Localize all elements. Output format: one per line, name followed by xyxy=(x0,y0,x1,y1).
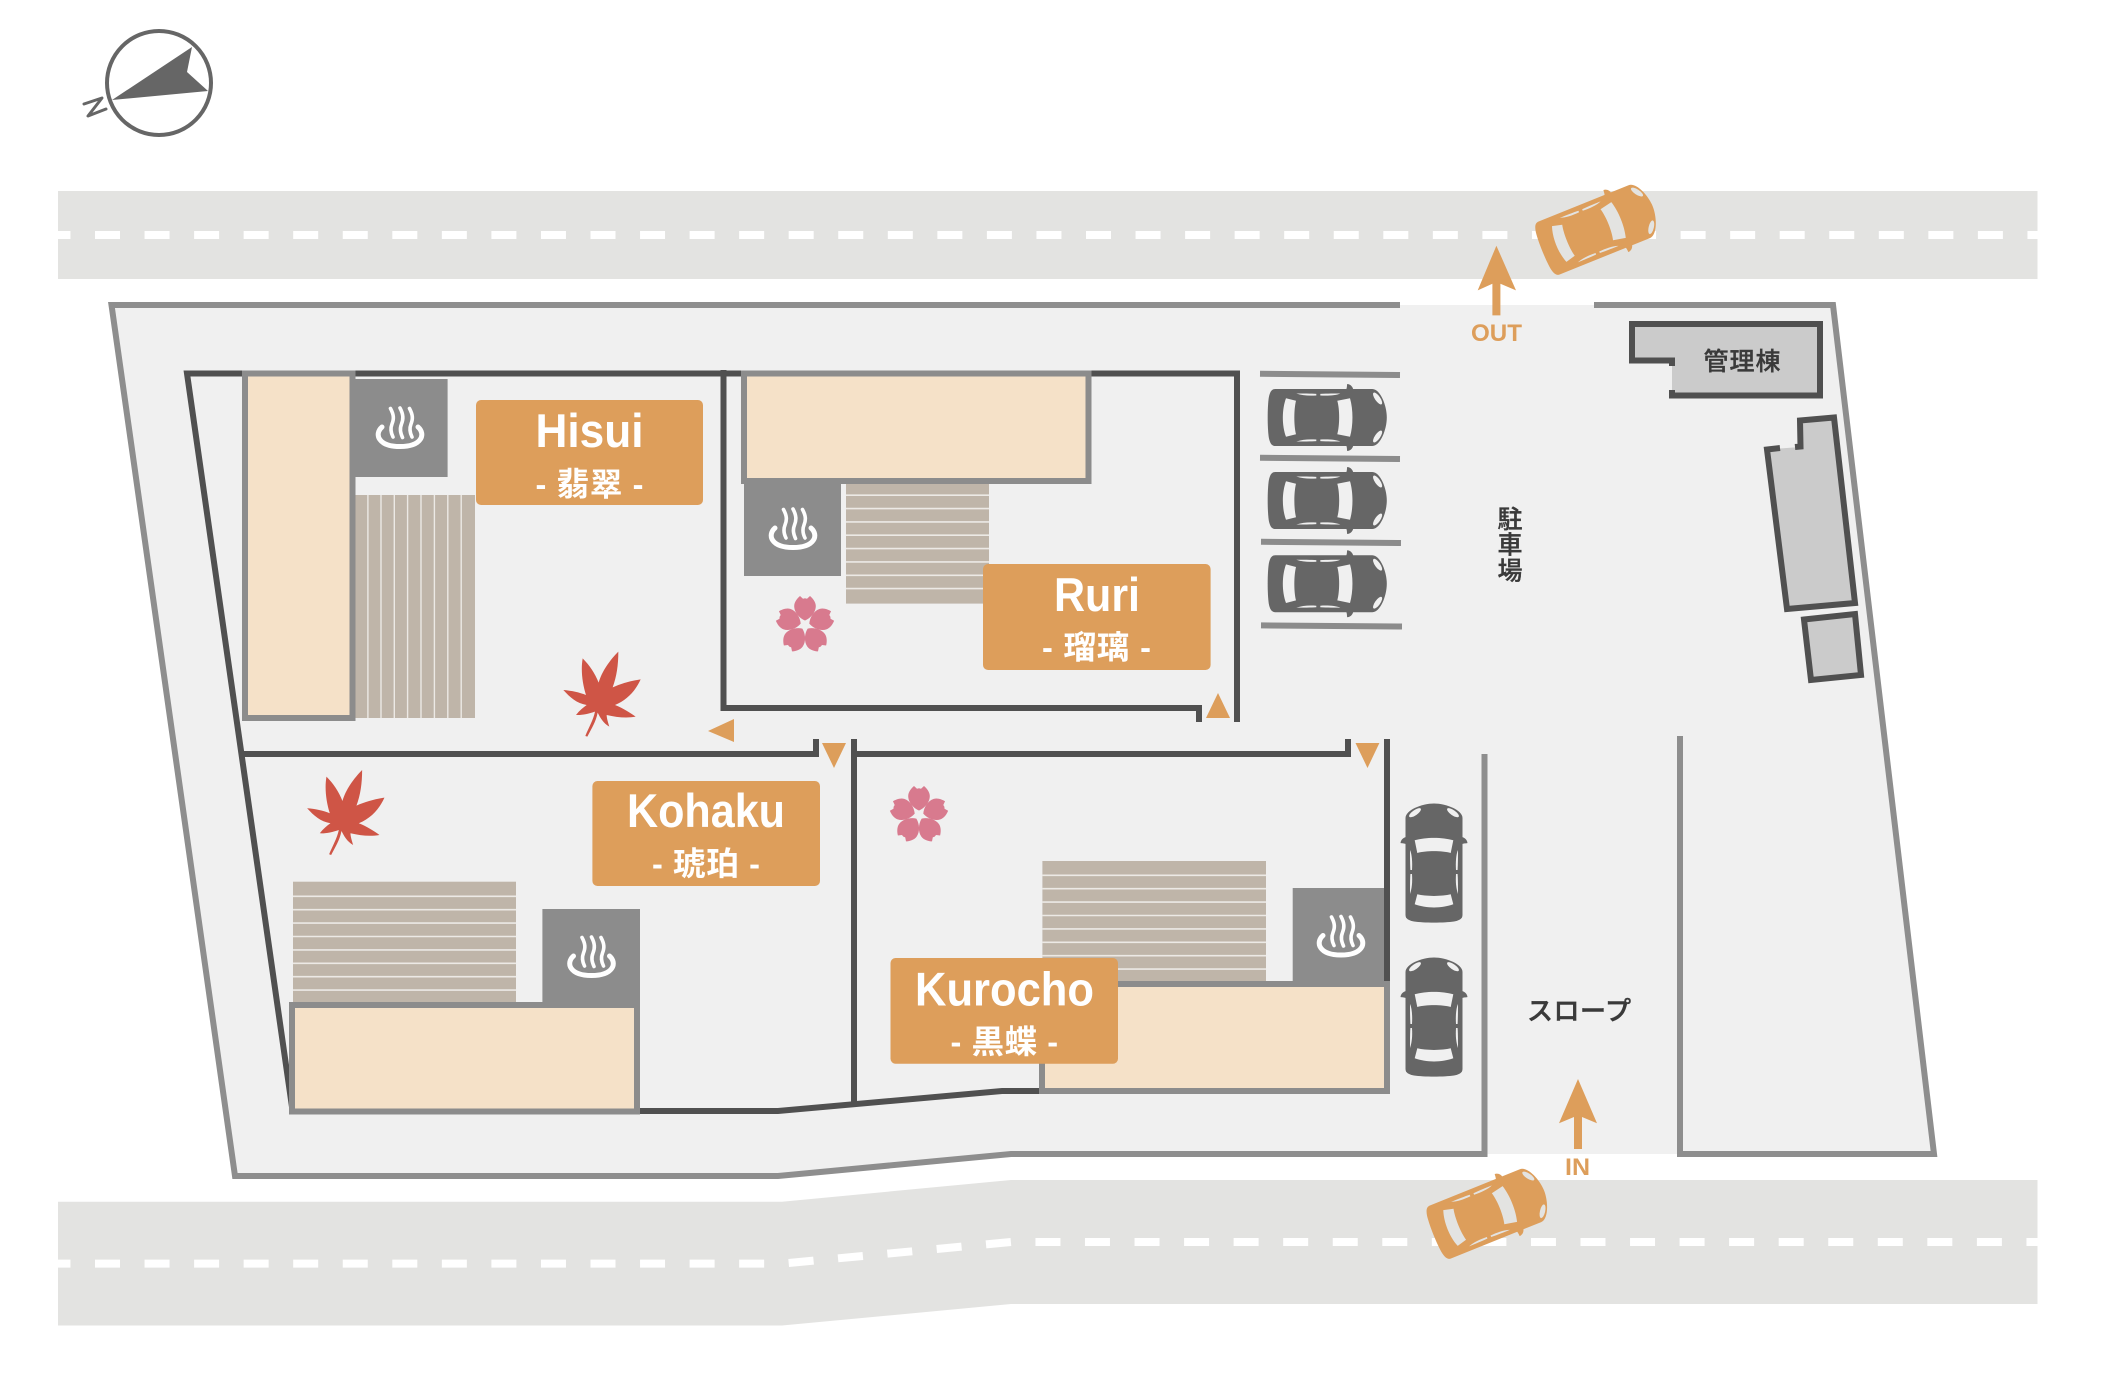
Kohaku label: Kohaku xyxy=(627,784,785,837)
moving car: exit xyxy=(1530,175,1665,282)
Kohaku bath xyxy=(542,909,640,1004)
Kurocho building xyxy=(1042,984,1387,1091)
entrance marker: Ruri xyxy=(1206,693,1230,718)
Kurocho label xyxy=(890,958,1118,1064)
road: top xyxy=(58,191,2038,279)
Kurocho label: - 黒蝶 - xyxy=(951,1024,1058,1060)
Hisui deck xyxy=(355,495,475,718)
parked car 4 xyxy=(1400,804,1468,923)
entrance marker: Kohaku xyxy=(822,743,846,768)
parking lines xyxy=(1260,374,1402,626)
label: parking xyxy=(1497,506,1523,586)
arrow: OUT: OUT xyxy=(1471,320,1522,347)
Hisui label xyxy=(476,400,703,505)
Hisui building xyxy=(245,374,352,718)
icon: cherry blossom (Kurocho) xyxy=(888,786,950,845)
compass xyxy=(84,31,211,135)
Hisui label: - 翡翠 - xyxy=(536,466,644,502)
Kohaku label xyxy=(592,781,820,886)
unit: Kurocho xyxy=(890,861,1387,1091)
Kurocho deck xyxy=(1042,861,1266,983)
unit: Kohaku xyxy=(292,781,820,1112)
arrow: IN: IN xyxy=(1565,1154,1590,1181)
Ruri building xyxy=(744,374,1088,481)
Hisui label: Hisui xyxy=(536,404,644,457)
parked car 5 xyxy=(1400,958,1468,1077)
road: bottom xyxy=(58,1180,2038,1326)
parked car 3 xyxy=(1268,550,1387,617)
management building: 管理棟 xyxy=(1703,348,1782,376)
entrance marker: Hisui xyxy=(708,719,734,742)
Kurocho bath xyxy=(1293,888,1384,983)
Kohaku deck xyxy=(293,882,516,1004)
Ruri label xyxy=(983,564,1211,670)
arrow: IN xyxy=(1559,1079,1597,1181)
arrow: OUT xyxy=(1471,246,1522,347)
icon: maple leaf (Kohaku) xyxy=(307,770,384,855)
entrance marker: Kurocho xyxy=(1356,743,1379,768)
management building xyxy=(1632,324,1820,396)
side building: small xyxy=(1804,614,1861,680)
compound walls xyxy=(187,370,1387,1114)
Hisui bath xyxy=(352,379,448,477)
icon: maple leaf (Hisui) xyxy=(563,652,641,737)
parked car 1 xyxy=(1268,384,1387,451)
label: parking: 駐 xyxy=(1497,506,1523,534)
Kohaku label: - 琥珀 - xyxy=(652,846,760,882)
icon: cherry blossom (Ruri) xyxy=(774,596,836,655)
label: slope: スロープ xyxy=(1527,996,1631,1026)
unit: Hisui xyxy=(245,374,703,718)
side building: long xyxy=(1767,418,1855,609)
Ruri bath xyxy=(744,484,841,576)
parked car 2 xyxy=(1268,467,1387,534)
label: parking: 車 xyxy=(1497,532,1523,560)
Ruri label: - 瑠璃 - xyxy=(1042,630,1151,666)
site lot xyxy=(112,305,1934,1176)
Kohaku building xyxy=(292,1005,637,1112)
moving car: entry xyxy=(1421,1159,1557,1266)
unit: Ruri xyxy=(744,374,1211,670)
label: parking: 場 xyxy=(1497,558,1523,586)
Kurocho label: Kurocho xyxy=(915,963,1094,1016)
Ruri label: Ruri xyxy=(1054,568,1140,621)
Ruri deck xyxy=(846,484,989,604)
